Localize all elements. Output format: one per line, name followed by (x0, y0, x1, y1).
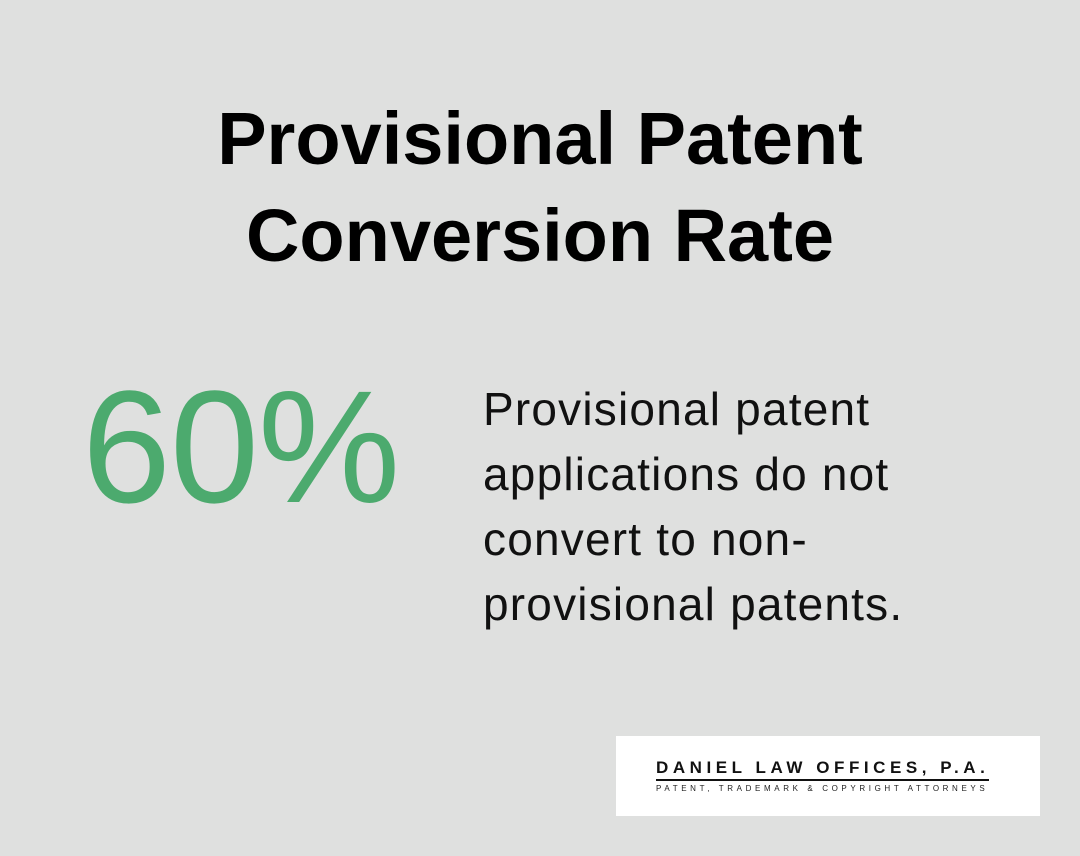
description text: provisional patents. (483, 578, 903, 630)
logo: Daniel Law Offices (616, 736, 1040, 816)
title (217, 97, 863, 277)
description text: applications do not (483, 448, 889, 500)
stat: 60%: 60% (82, 357, 399, 536)
description text: Provisional patent (483, 383, 870, 435)
description text: convert to non- (483, 513, 808, 565)
title: Conversion Rate (246, 194, 834, 277)
description text (483, 383, 903, 630)
logo: Daniel Law Offices: DANIEL LAW OFFICES, P.A. (656, 758, 989, 777)
title: Provisional Patent (217, 97, 863, 180)
logo: Daniel Law Offices: PATENT, TRADEMARK & COPYRIGHT ATTORNEYS (656, 784, 988, 793)
